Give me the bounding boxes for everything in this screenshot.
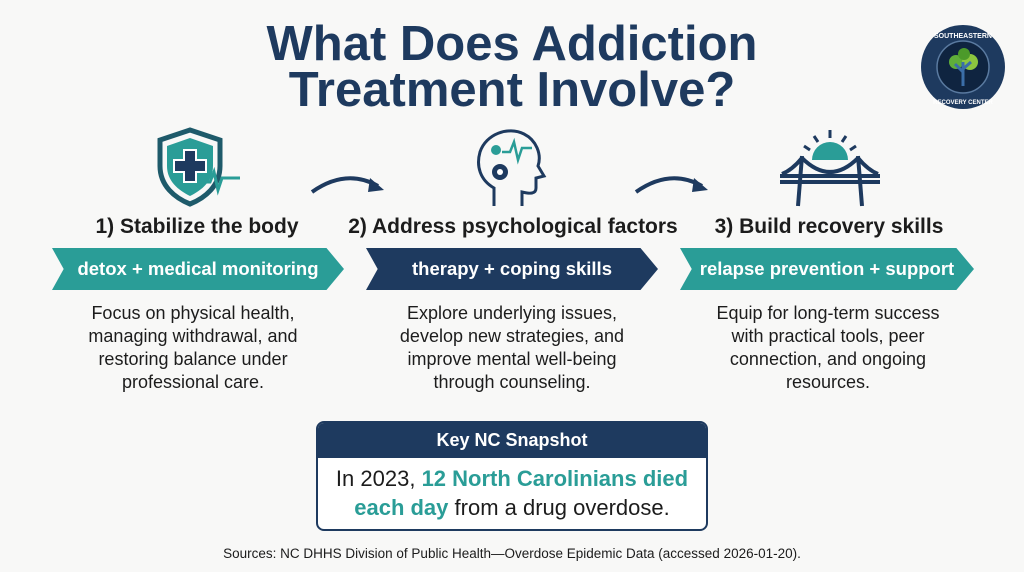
text 3: with practical tools, peer <box>731 326 925 346</box>
text 2: develop new strategies, and <box>400 326 624 346</box>
text 3: resources. <box>786 372 870 392</box>
text 3: connection, and ongoing <box>730 349 926 369</box>
banner 2 <box>366 248 658 290</box>
text 3: Equip for long-term success <box>716 303 940 323</box>
banner 2: therapy + coping skills <box>412 258 612 279</box>
text 2: improve mental well-being <box>407 349 617 369</box>
banner 3: relapse prevention + support <box>700 258 954 279</box>
title: What Does Addiction <box>267 17 757 71</box>
snapshot text: each day from a drug overdose. <box>354 495 670 520</box>
snapshot text: In 2023, 12 North Carolinians died <box>336 466 688 491</box>
heading 1: 1) Stabilize the body <box>95 215 299 238</box>
text 1: professional care. <box>122 372 264 392</box>
arrow 2 <box>634 176 708 194</box>
logo <box>921 25 1005 109</box>
text 3 <box>716 303 940 392</box>
text 1: managing withdrawal, and <box>88 326 298 346</box>
snapshot header <box>318 423 706 458</box>
title: Treatment Involve? <box>289 63 735 117</box>
logo: RECOVERY CENTER <box>933 100 994 106</box>
text 2: Explore underlying issues, <box>407 303 617 323</box>
snapshot box <box>316 421 708 531</box>
text 2: through counseling. <box>433 372 591 392</box>
text 1: Focus on physical health, <box>91 303 295 323</box>
banner 1: detox + medical monitoring <box>77 258 319 279</box>
sources: Sources: NC DHHS Division of Public Health—Overdose Epidemic Data (accessed 2026-01-20). <box>223 546 801 561</box>
banner 1 <box>52 248 344 290</box>
snapshot text <box>336 466 688 520</box>
text 2 <box>400 303 624 392</box>
banner 3 <box>680 248 974 290</box>
heading 2: 2) Address psychological factors <box>348 215 678 238</box>
title <box>266 17 757 117</box>
snapshot header: Key NC Snapshot <box>436 430 588 450</box>
icon: head <box>477 129 546 206</box>
icon: shield <box>158 127 240 207</box>
arrow 1 <box>310 176 384 194</box>
heading 3: 3) Build recovery skills <box>715 215 943 238</box>
icon: bridge <box>780 130 880 206</box>
logo: SOUTHEASTERN <box>934 33 992 40</box>
text 1: restoring balance under <box>98 349 288 369</box>
text 1 <box>88 303 298 392</box>
